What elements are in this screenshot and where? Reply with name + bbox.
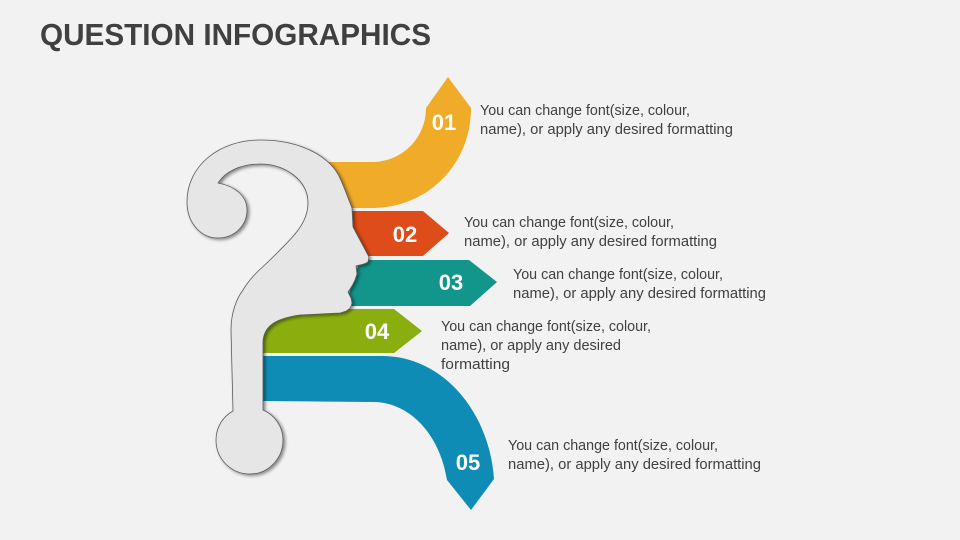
text block 02: name), or apply any desired formatting: [464, 233, 717, 250]
text block 04: [441, 318, 651, 373]
text block 05: You can change font(size, colour,: [508, 437, 718, 454]
question mark head silhouette: [187, 140, 369, 474]
text block 02: [464, 214, 717, 250]
arrow 03: teal: [345, 260, 497, 306]
text block 03: [513, 266, 766, 302]
text block 05: name), or apply any desired formatting: [508, 456, 761, 473]
text block 01: [480, 102, 733, 138]
arrow 05: blue curved: [263, 356, 494, 510]
number 03: 03: [439, 270, 463, 295]
number 05: 05: [456, 450, 480, 475]
text block 05: [508, 437, 761, 473]
number 02: 02: [393, 222, 417, 247]
text block 04: formatting: [441, 356, 510, 373]
number 01: 01: [432, 110, 456, 135]
title: QUESTION INFOGRAPHICS: [40, 18, 431, 52]
text block 04: You can change font(size, colour,: [441, 318, 651, 335]
text block 03: name), or apply any desired formatting: [513, 285, 766, 302]
text block 01: name), or apply any desired formatting: [480, 121, 733, 138]
arrow 04: green: [263, 309, 422, 353]
arrow 01: orange curved: [326, 77, 471, 208]
text block 02: You can change font(size, colour,: [464, 214, 674, 231]
number 04: 04: [365, 319, 390, 344]
arrow 02: red: [345, 211, 449, 256]
text block 03: You can change font(size, colour,: [513, 266, 723, 283]
text block 04: name), or apply any desired: [441, 337, 621, 354]
text block 01: You can change font(size, colour,: [480, 102, 690, 119]
